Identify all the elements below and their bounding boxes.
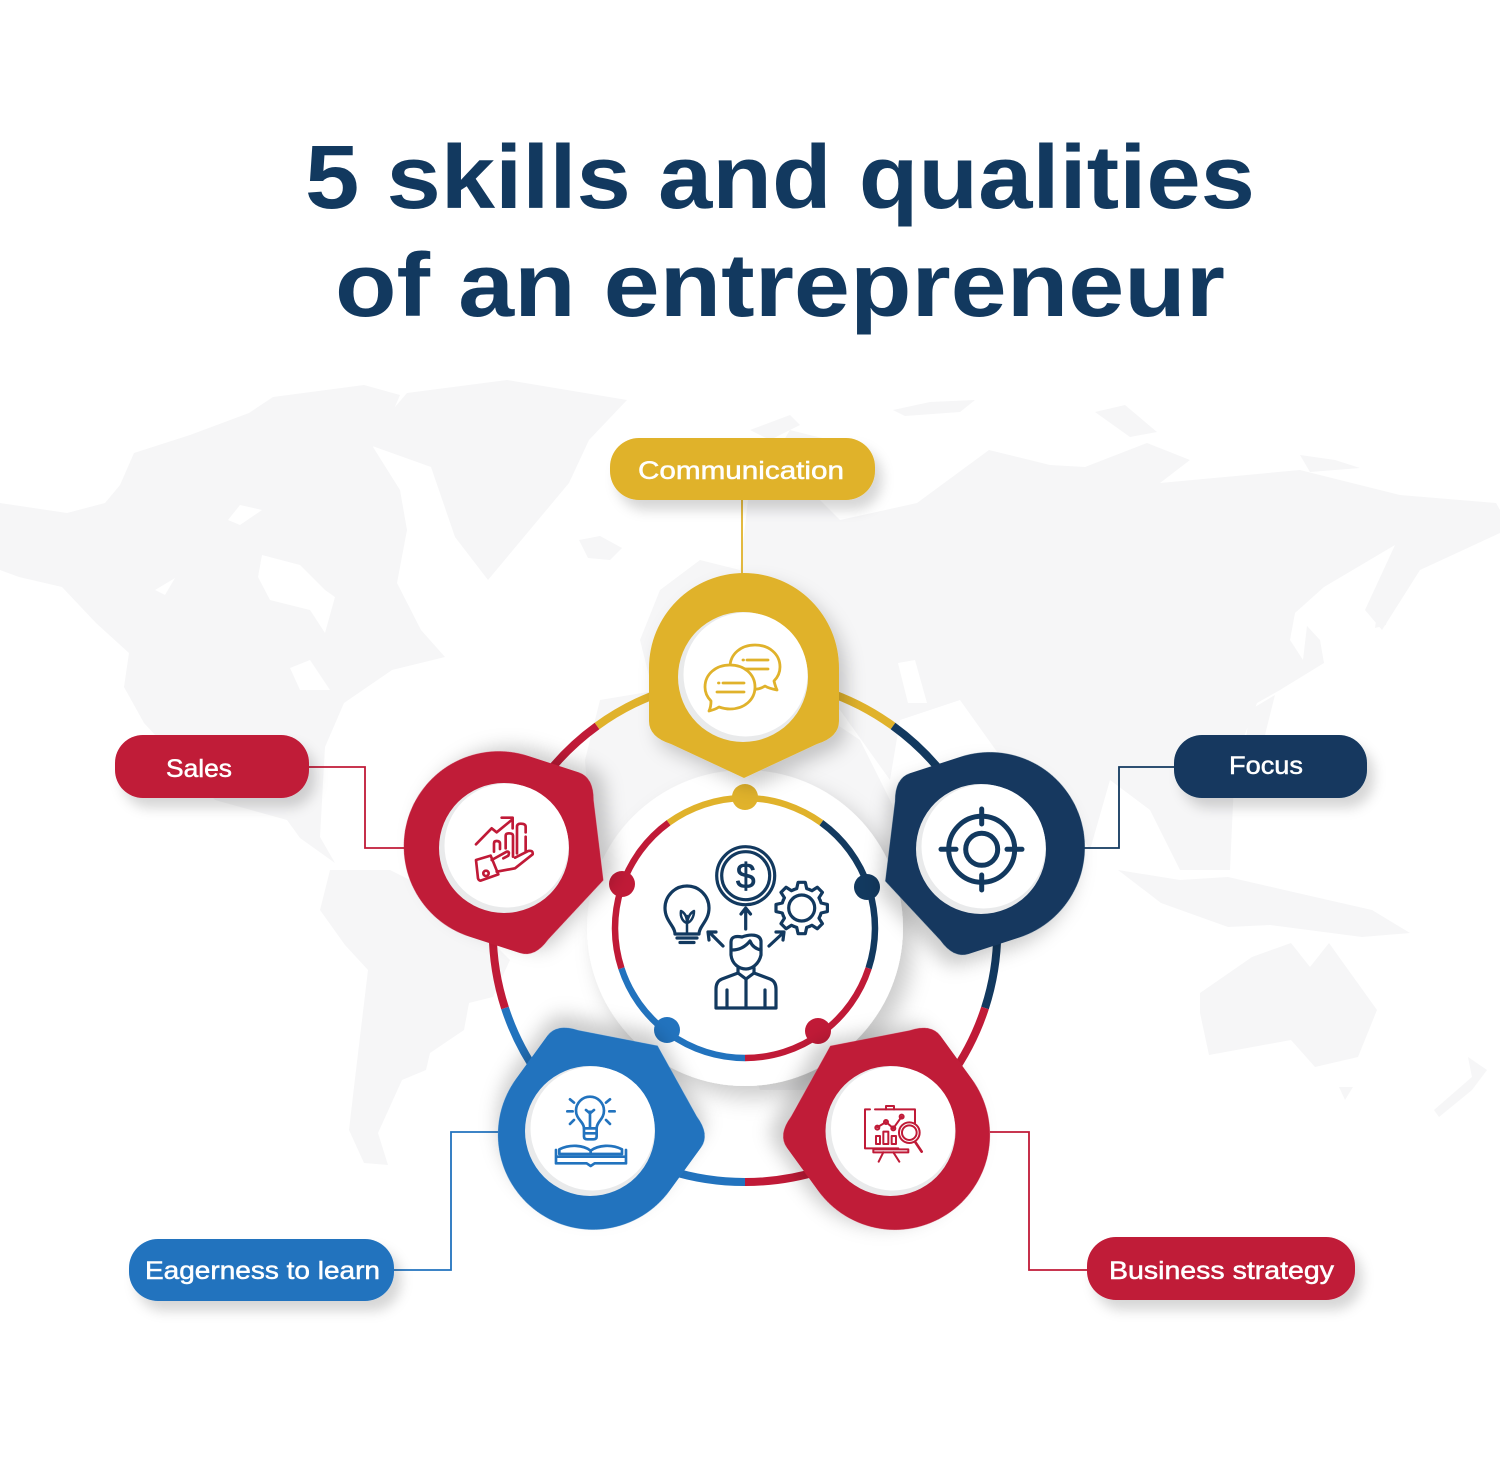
icon: dollar coin: [717, 847, 775, 905]
node: sales: [379, 727, 633, 971]
label: communication: [610, 438, 875, 500]
label: communication: Communication: [638, 457, 844, 485]
node: focus: [856, 727, 1110, 972]
icon: entrepreneur with ideas: [665, 847, 827, 1008]
label: focus: Focus: [1229, 752, 1303, 780]
title: [305, 128, 1255, 336]
inner ring with dots: [609, 784, 880, 1058]
label: sales: [115, 735, 309, 798]
label: eagerness to learn: [129, 1239, 394, 1301]
icon: presentation board with magnifier: [865, 1106, 922, 1162]
outer ring: [493, 678, 997, 1182]
title: 5 skills and qualities: [305, 128, 1255, 228]
icon: light bulb: [665, 886, 709, 942]
central white disc: [587, 770, 903, 1086]
icon: person: [716, 935, 776, 1008]
icon: three arrows: [708, 908, 784, 946]
label: sales: Sales: [166, 755, 232, 783]
icon: target: [941, 809, 1022, 890]
icon: bulb over open book: [556, 1097, 626, 1166]
title: of an entrepreneur: [335, 236, 1225, 336]
label: focus: [1174, 735, 1367, 798]
icon: gear: [776, 882, 827, 934]
label: eagerness to learn: Eagerness to learn: [145, 1257, 380, 1285]
icon: speech bubbles: [705, 645, 780, 711]
icon: dollar coin: $: [736, 857, 755, 896]
node: business strategy: [753, 990, 1028, 1268]
node: communication: [649, 573, 839, 778]
icon: hand with growth chart: [476, 818, 533, 881]
label: business strategy: Business strategy: [1109, 1257, 1335, 1285]
water cut-outs: [155, 505, 1310, 703]
connector lines: [309, 500, 1174, 1270]
label: business strategy: [1087, 1237, 1355, 1300]
node: eagerness to learn: [460, 990, 734, 1267]
background world map: [0, 380, 1500, 1165]
